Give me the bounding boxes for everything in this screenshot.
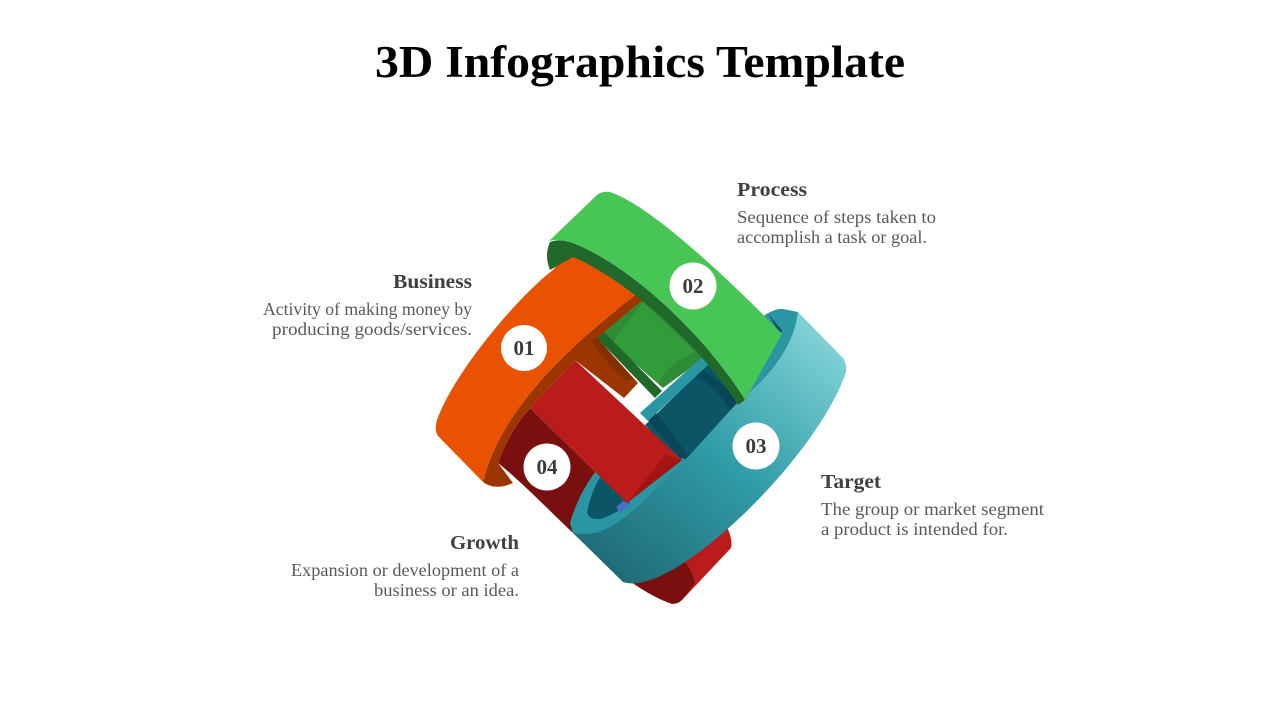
green band bbox=[547, 192, 782, 405]
text: growth bbox=[291, 532, 519, 600]
text: growth: Expansion or development of a bbox=[291, 560, 519, 580]
text: process: Sequence of steps taken to bbox=[737, 207, 936, 227]
badge 01 bbox=[501, 325, 547, 371]
teal ring inner wall and rim bbox=[570, 309, 798, 542]
text: growth: Growth bbox=[450, 532, 519, 554]
orange band bbox=[436, 256, 637, 482]
green ring inner wall bbox=[562, 256, 715, 398]
teal band bbox=[573, 312, 846, 584]
text: business: producing goods/services. bbox=[272, 319, 472, 339]
badge 01: 01 bbox=[514, 336, 534, 360]
text: business: Business bbox=[393, 271, 472, 293]
text: business: Activity of making money by bbox=[263, 299, 472, 319]
badge 02: 02 bbox=[682, 274, 704, 298]
orange ring inner wall bbox=[483, 294, 645, 487]
text: target: a product is intended for. bbox=[821, 519, 1008, 539]
red band bbox=[530, 360, 682, 503]
text: target: The group or market segment bbox=[821, 499, 1044, 519]
badge 03: 03 bbox=[746, 434, 766, 458]
text: process: accomplish a task or goal. bbox=[737, 227, 927, 247]
text: target: Target bbox=[821, 471, 881, 493]
text: process bbox=[737, 179, 936, 247]
3D ring diagram bbox=[436, 192, 846, 604]
text: process: Process bbox=[737, 179, 807, 201]
red band back side bbox=[498, 408, 732, 604]
title: 3D Infographics Template bbox=[375, 37, 905, 87]
text: target bbox=[821, 471, 1044, 539]
badge 03 bbox=[732, 422, 780, 470]
badge 02 bbox=[670, 262, 716, 310]
text: business bbox=[263, 271, 472, 339]
badge 04: 04 bbox=[536, 455, 558, 479]
text: growth: business or an idea. bbox=[374, 580, 519, 600]
badge 04 bbox=[524, 444, 570, 490]
